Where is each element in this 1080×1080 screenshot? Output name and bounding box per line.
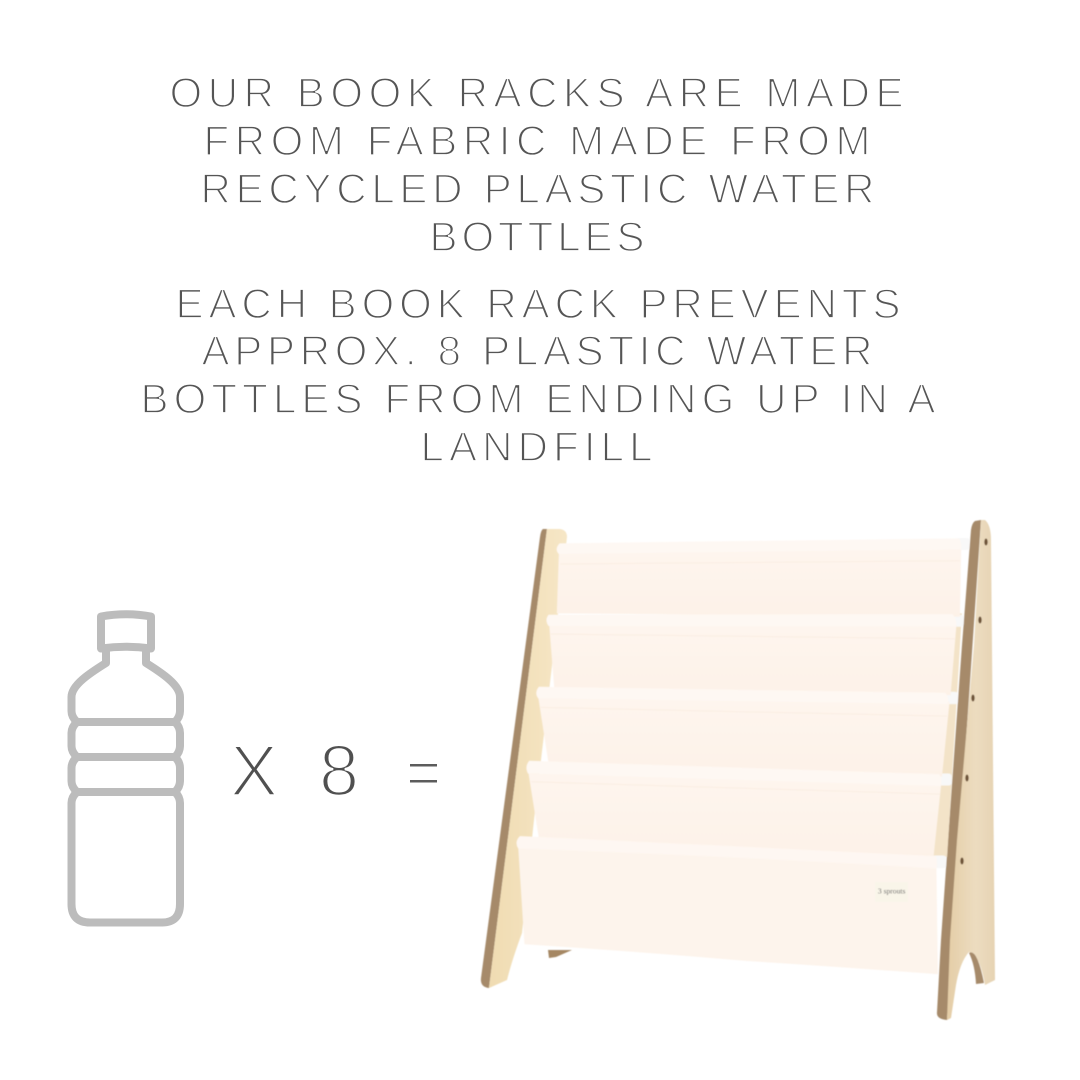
text block: landfill prevention statement: BOTTLES FROM ENDING UP IN A <box>140 375 936 422</box>
icon: plastic water bottle <box>72 614 180 922</box>
heading: recycled fabric statement: FROM FABRIC MADE FROM <box>204 117 870 164</box>
brand tag <box>875 882 908 902</box>
text block: landfill prevention statement: APPROX. 8 PLASTIC WATER <box>202 327 872 374</box>
left wooden side panel <box>481 529 567 988</box>
brand tag: 3 sprouts <box>878 887 906 895</box>
rear foot <box>548 950 572 958</box>
book rack product illustration <box>481 520 995 1020</box>
text block: landfill prevention statement: LANDFILL <box>420 423 652 470</box>
text block: landfill prevention statement: EACH BOOK RACK PREVENTS <box>176 280 900 327</box>
fabric shelf 4 <box>526 761 941 859</box>
fabric shelf 3 <box>536 687 950 777</box>
wood behind the fabric <box>932 613 962 857</box>
fabric shelf 5, front pocket <box>517 836 938 974</box>
text block: landfill prevention statement <box>140 280 936 470</box>
heading: recycled fabric statement: RECYCLED PLASTIC WATER <box>200 165 874 212</box>
fabric shelf 1 <box>557 538 961 617</box>
heading: recycled fabric statement: BOTTLES <box>430 213 644 260</box>
rods <box>932 538 970 868</box>
heading: recycled fabric statement: OUR BOOK RACKS ARE MADE <box>170 69 904 116</box>
equals sign <box>410 764 437 782</box>
fabric shelf 2 <box>546 614 956 695</box>
multiply by eight label: 8 <box>319 732 359 812</box>
right wooden side panel <box>937 520 995 1020</box>
multiply by eight label <box>230 732 359 812</box>
multiply by eight label: X <box>230 732 278 812</box>
heading: recycled fabric statement <box>170 69 904 260</box>
